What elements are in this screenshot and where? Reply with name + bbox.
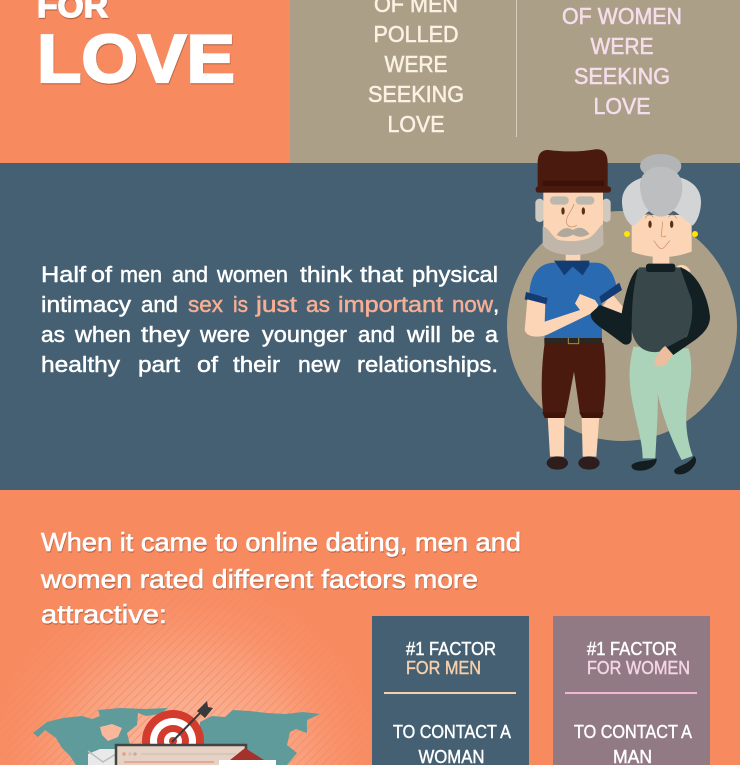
illustration: elderly couple <box>507 149 737 474</box>
title: LOVE <box>37 21 235 97</box>
card text: TO CONTACT A <box>574 721 693 742</box>
text: intimacy paragraph: that <box>360 262 404 287</box>
card heading: #1 FACTOR <box>406 638 496 659</box>
text: women statistic: LOVE <box>594 93 650 119</box>
text: intimacy paragraph: is <box>233 292 248 317</box>
text: intimacy paragraph: they <box>141 322 191 347</box>
text: men statistic: SEEKING <box>368 81 464 107</box>
arrow <box>172 701 213 742</box>
text: intimacy paragraph: were <box>199 322 250 347</box>
text: intimacy paragraph: younger <box>262 322 348 347</box>
envelope left <box>88 749 116 765</box>
heading: online dating: When it came to online dating, men and <box>41 527 521 557</box>
text: intimacy paragraph: women <box>216 262 288 287</box>
panel: seeking love stats <box>290 0 740 163</box>
text: intimacy paragraph: and <box>141 292 178 317</box>
browser window <box>116 745 246 765</box>
heading: online dating: women rated different factors more <box>40 564 478 594</box>
card heading <box>406 638 496 678</box>
text: men statistic: WERE <box>384 51 448 77</box>
text: intimacy paragraph: of <box>197 352 219 377</box>
card text <box>574 721 693 765</box>
card: factor for men <box>372 616 529 765</box>
card heading: #1 FACTOR <box>587 638 677 659</box>
text: women statistic: SEEKING <box>574 63 670 89</box>
text: intimacy paragraph: Half <box>41 262 87 287</box>
illustration: world map with target and mail <box>33 701 320 765</box>
text: intimacy paragraph: part <box>138 352 181 377</box>
text: intimacy paragraph: of <box>91 262 113 287</box>
text: intimacy paragraph: sex <box>188 292 224 317</box>
text: intimacy paragraph <box>41 262 499 377</box>
text: intimacy paragraph: and <box>358 322 395 347</box>
text: intimacy paragraph: healthy <box>41 352 121 377</box>
text: intimacy paragraph: new <box>298 352 341 377</box>
text: intimacy paragraph: think <box>300 262 353 287</box>
text: women statistic: OF WOMEN <box>562 3 682 29</box>
text: intimacy paragraph: as <box>306 292 330 317</box>
woman <box>591 154 710 474</box>
text: men statistic: POLLED <box>374 21 458 47</box>
man <box>525 149 623 470</box>
map gulf <box>100 724 122 741</box>
text: intimacy paragraph: now <box>452 292 494 317</box>
text: intimacy paragraph: will <box>406 322 441 347</box>
card text: TO CONTACT A <box>393 721 512 742</box>
text: intimacy paragraph: relationships. <box>357 352 498 377</box>
panel: title block <box>0 0 290 163</box>
card heading: FOR MEN <box>406 657 481 678</box>
world map <box>33 708 320 765</box>
heading: online dating: attractive: <box>41 599 167 629</box>
text: intimacy paragraph: their <box>233 352 281 377</box>
panel: intimacy section <box>0 163 740 490</box>
text: men statistic <box>368 0 464 137</box>
target <box>142 710 204 765</box>
text: intimacy paragraph: and <box>172 262 208 287</box>
text: intimacy paragraph: just <box>255 292 298 317</box>
text: women statistic <box>562 3 682 119</box>
heading: online dating <box>40 527 521 629</box>
text: intimacy paragraph: as <box>41 322 65 347</box>
text: men statistic: LOVE <box>388 111 444 137</box>
card heading: FOR WOMEN <box>587 657 690 678</box>
panel: online dating section <box>22 612 348 765</box>
card: factor for women <box>553 616 710 765</box>
card heading <box>587 638 690 678</box>
text: intimacy paragraph: physical <box>412 262 498 287</box>
envelope right <box>219 748 276 765</box>
text: intimacy paragraph: , <box>493 292 499 317</box>
text: intimacy paragraph: be <box>451 322 475 347</box>
text: intimacy paragraph: a <box>485 322 499 347</box>
text: intimacy paragraph: men <box>120 262 162 287</box>
text: intimacy paragraph: when <box>74 322 131 347</box>
card text <box>393 721 512 765</box>
text: intimacy paragraph: intimacy <box>41 292 132 317</box>
text: women statistic: WERE <box>590 33 654 59</box>
text: intimacy paragraph: important <box>338 292 444 317</box>
